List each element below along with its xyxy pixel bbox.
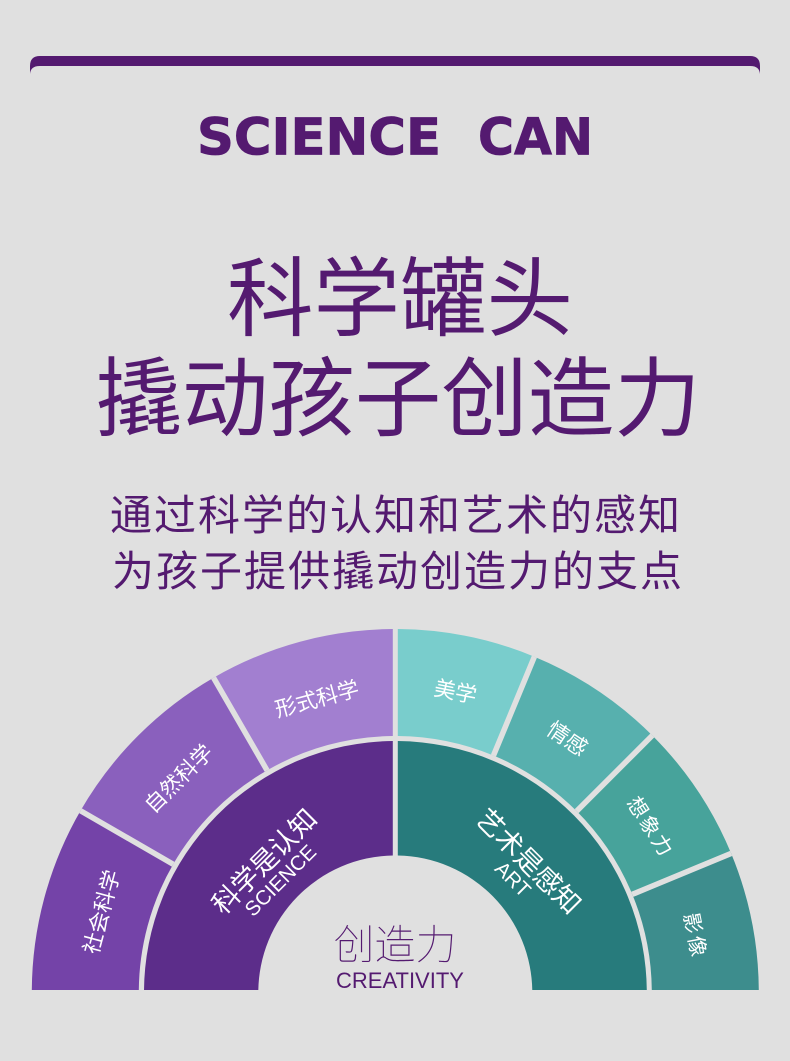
sector: 社会科学	[32, 811, 173, 992]
label: 情感: 情感	[541, 713, 594, 763]
sector: 想象力	[577, 735, 731, 894]
label: 艺术是感知: 艺术是感知	[468, 798, 592, 922]
top bar	[30, 56, 760, 74]
sector: 美学	[398, 629, 534, 756]
center subtitle: CREATIVITY: CREATIVITY	[336, 968, 464, 993]
logo: SCIENCE CAN	[197, 108, 593, 166]
label: 影像: 影像	[678, 910, 716, 962]
semicircle diagram	[32, 629, 759, 992]
inner sector: science	[144, 741, 393, 992]
sector: 形式科学	[214, 629, 393, 770]
sector: 情感	[493, 657, 652, 811]
label: 形式科学: 形式科学	[271, 672, 362, 724]
title: 科学罐头	[227, 229, 573, 354]
label: 自然科学: 自然科学	[137, 737, 219, 819]
inner sector: art	[398, 741, 647, 992]
subtitle	[110, 482, 684, 599]
logo: SCIENCE CAN: SCIENCE	[197, 108, 441, 166]
label: 科学是认知: 科学是认知	[201, 798, 325, 922]
title	[95, 229, 701, 454]
sector: 自然科学	[80, 678, 267, 864]
center title: 创造力: 创造力	[334, 911, 456, 971]
title: 撬动孩子创造力	[95, 329, 701, 454]
label: 美学: 美学	[432, 671, 480, 710]
label: SCIENCE: SCIENCE	[240, 840, 321, 921]
subtitle: 通过科学的认知和艺术的感知	[110, 482, 682, 543]
label: 社会科学: 社会科学	[75, 866, 127, 957]
sector: 影像	[632, 853, 759, 992]
label: 想象力: 想象力	[621, 790, 683, 862]
logo: SCIENCE CAN: CAN	[478, 108, 593, 166]
label: ART: ART	[490, 857, 535, 902]
subtitle: 为孩子提供撬动创造力的支点	[112, 538, 684, 599]
